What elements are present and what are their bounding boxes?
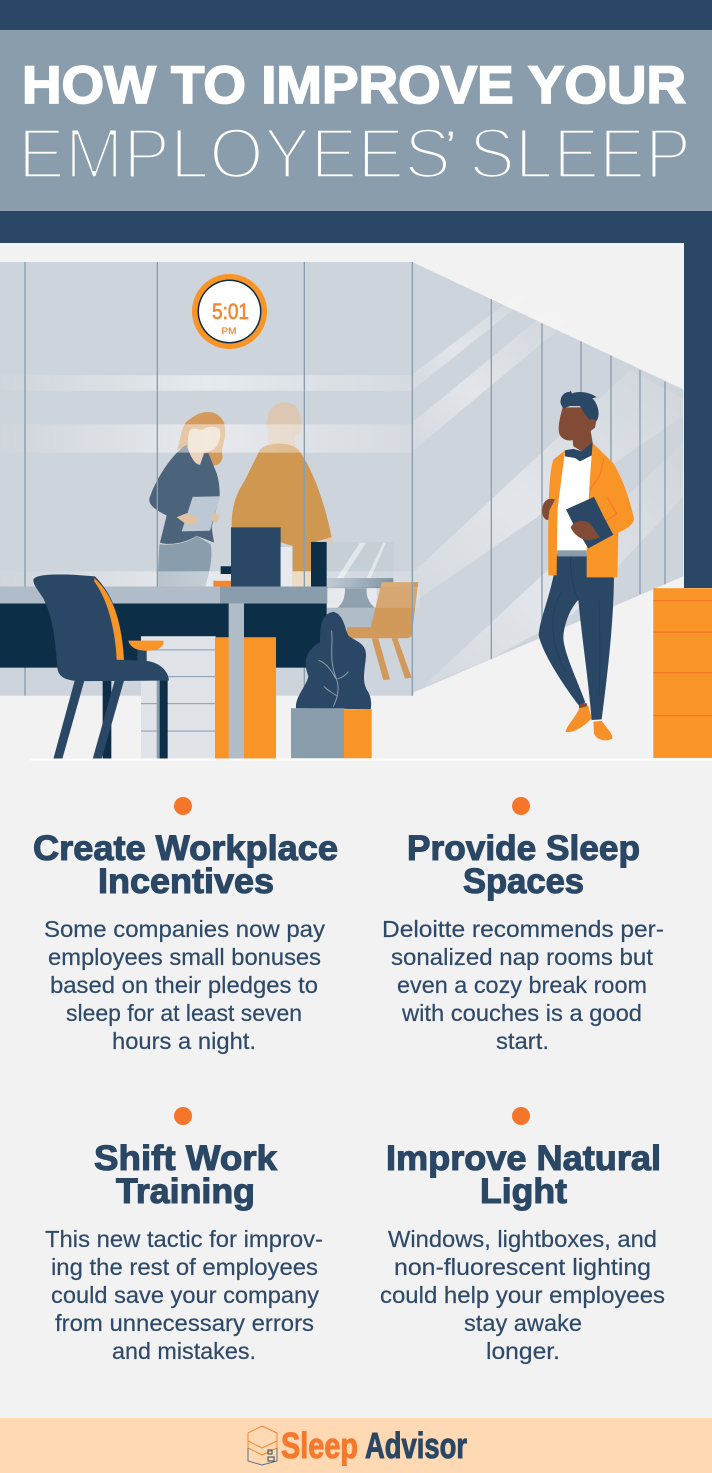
body text: based on their pledges to [50,972,318,998]
glass wall [0,262,413,696]
body text [382,916,664,1054]
navy office chair [33,574,169,759]
bullet dot [174,797,192,815]
hair [560,390,599,421]
logo wordmark [281,1425,467,1466]
trousers [539,554,614,720]
body text: Some companies now pay [44,916,326,942]
logo wordmark: Sleep [281,1425,358,1466]
panel: provide sleep spaces [382,797,664,1054]
left part of the scene [0,262,420,759]
heading [407,829,640,901]
heading [386,1139,661,1211]
body text [44,916,326,1054]
title line 2: SLEEP [469,115,691,194]
body text [45,1226,323,1364]
heading: Light [480,1172,567,1211]
orange cabinet [653,588,712,758]
man and cabinet layer [539,390,712,758]
standing man [539,390,634,740]
heading: Provide Sleep [407,829,640,868]
title line 2: ’ [446,122,455,169]
header banner [0,0,712,243]
body text: Windows, lightboxes, and [388,1226,657,1252]
body text: even a cozy break room [397,972,647,998]
body text: stay awake [464,1310,582,1336]
tablet [566,497,613,548]
orange chair behind glass [347,582,418,680]
body text: could help your employees [380,1282,665,1308]
body text: start. [496,1028,549,1054]
heading [33,829,338,901]
body text: hours a night. [112,1028,256,1054]
shirt [557,453,592,553]
body text: sleep for at least seven [66,1000,302,1026]
heading: Create Workplace [33,829,338,868]
side glass wall [412,262,683,693]
panel: shift work training [45,1107,323,1364]
wall mullions [24,262,413,696]
face and neck [559,407,597,451]
logo wordmark: Advisor [365,1425,467,1466]
bullet dot [512,797,530,815]
panel: improve natural light [380,1107,665,1364]
wall clock: PM [222,326,236,336]
body text: ing the rest of employees [51,1254,318,1280]
side wall mullions [491,299,666,659]
heading: Incentives [98,862,274,901]
wall reflections [412,292,683,686]
desk monitor [213,527,327,587]
desk [0,587,327,759]
wall clock: 5:01 [212,299,249,324]
man behind glass [232,402,333,588]
title line 1: HOW TO IMPROVE YOUR [22,56,686,115]
glass light reflections [0,375,420,608]
heading: Training [116,1172,255,1211]
body text: could save your company [51,1282,320,1308]
heading: Shift Work [94,1139,278,1178]
heading: Spaces [463,862,584,901]
body text: This new tactic for improv- [45,1226,323,1252]
bullet dot [512,1107,530,1125]
jacket [548,450,565,575]
potted plant [291,612,372,758]
body text: employees small bonuses [48,944,321,970]
panel: create workplace incentives [33,797,338,1054]
heading [94,1139,278,1211]
woman behind glass [149,412,225,588]
wall clock [192,274,267,349]
shoes [578,703,588,713]
body text: sonalized nap rooms but [391,944,654,970]
bullet dot [174,1107,192,1125]
hands [571,521,600,540]
footer bar [0,1418,712,1473]
collar and bow tie [565,442,593,461]
title line 2: EMPLOYEES [18,115,451,194]
body text: non-fluorescent lighting [394,1254,651,1280]
right navy column [684,243,712,588]
body text: and mistakes. [112,1338,256,1364]
icon: mattress stack logo [248,1426,277,1465]
heading: Improve Natural [386,1139,661,1178]
title line 2 [18,115,691,194]
body text: longer. [486,1338,560,1364]
body text: with couches is a good [401,1000,642,1026]
body text: Deloitte recommends per- [382,916,664,942]
body text: from unnecessary errors [55,1310,314,1336]
computer behind glass [327,542,394,627]
illustration: office scene [0,243,712,760]
body text [380,1226,665,1364]
floor line [30,758,712,760]
